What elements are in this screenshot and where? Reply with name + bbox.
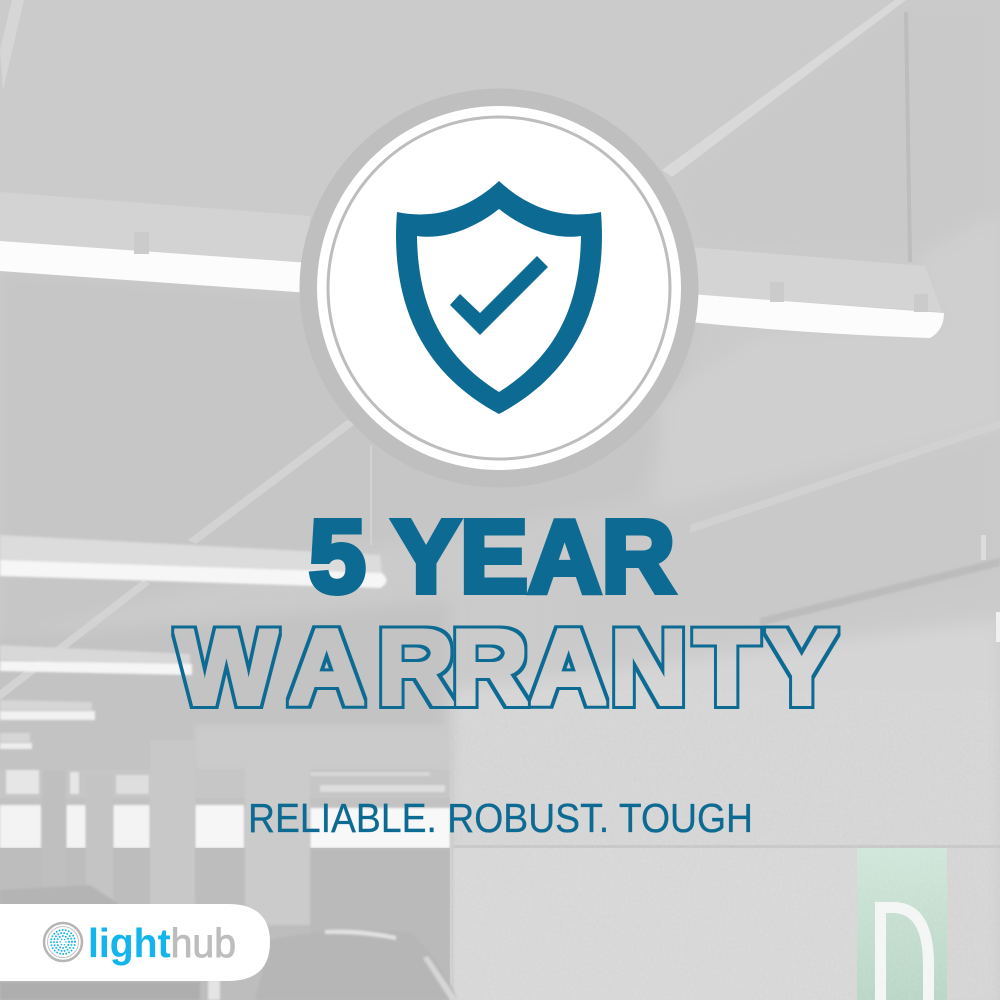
dark lower band: [0, 848, 450, 1000]
light fitting: lower left group: [0, 645, 192, 749]
parked cars: [0, 885, 458, 1000]
lower-left distance: [195, 725, 450, 770]
light fitting: middle left: [0, 535, 387, 588]
heading: 5 YEAR: 5 YEAR: [309, 499, 675, 614]
ceiling pipes and hangers: [662, 0, 906, 177]
bright openings: [0, 805, 41, 848]
tagline: RELIABLE. ROBUST. TOUGH: [248, 795, 753, 841]
emblem circle: [300, 88, 698, 488]
heading: WARRANTY outlined: WARRANTY: [176, 607, 837, 727]
pillars: [42, 770, 66, 900]
icon: shield with check mark: [396, 181, 602, 414]
logo wordmark: lighthub: [88, 920, 236, 966]
light fitting: upper left: [0, 192, 310, 293]
wall texture grain: [450, 690, 1000, 1000]
light fitting: upper right: [690, 247, 944, 338]
green parking sign: [857, 848, 947, 1000]
logo badge: [0, 904, 270, 981]
icon: lighthub emblem: [44, 923, 82, 961]
